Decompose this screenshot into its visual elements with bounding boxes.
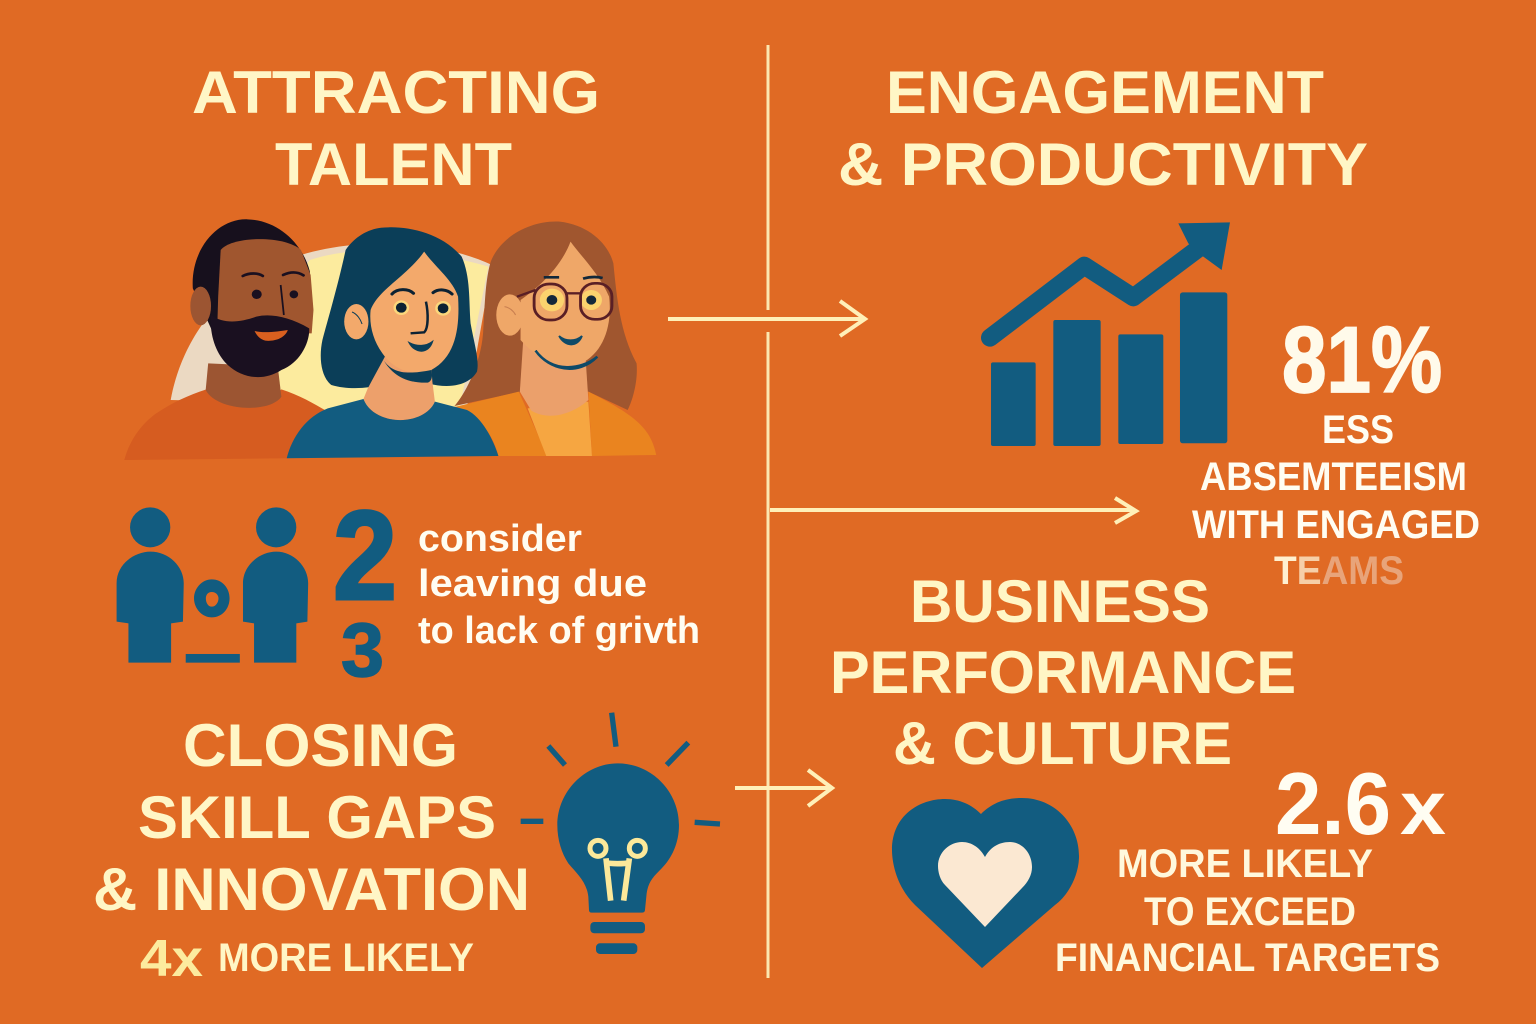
heading: attracting talent <box>192 59 600 198</box>
heading: closing skill gaps: & INNOVATION <box>93 856 530 923</box>
text: more likely to exceed financial targets: TO EXCEED <box>1144 890 1356 934</box>
text: less absenteeism: TEAMS <box>1274 549 1404 593</box>
arrow: talent to engagement <box>668 301 865 336</box>
text: less absenteeism: WITH ENGAGED <box>1192 503 1480 547</box>
icon: heart <box>892 798 1079 968</box>
text: consider leaving: consider <box>418 518 582 560</box>
heading: closing skill gaps: CLOSING <box>183 712 458 779</box>
heading: attracting talent: TALENT <box>275 131 512 198</box>
text: consider leaving: to lack of grivth <box>418 610 700 652</box>
stat: 4x more likely: 4x <box>140 930 203 988</box>
text: consider leaving <box>418 518 700 652</box>
text: consider leaving: leaving due <box>418 563 647 605</box>
text: less absenteeism: ESS <box>1322 408 1394 452</box>
icon: light bulb <box>521 713 720 954</box>
person: woman in blue <box>287 227 498 458</box>
heading: business performance and culture: & CULTURE <box>893 710 1232 777</box>
text: less absenteeism: ABSEMTEEISM <box>1200 455 1467 499</box>
heading: closing skill gaps: SKILL GAPS <box>138 784 496 851</box>
icon: two people with circle <box>117 507 308 663</box>
arrow: skills to performance <box>735 770 832 806</box>
stat: two thirds: 2 <box>333 485 397 626</box>
heading: business performance and culture: BUSINESS <box>910 568 1210 635</box>
text: more likely to exceed financial targets: FINANCIAL TARGETS <box>1055 936 1440 980</box>
heading: business performance and culture <box>830 568 1296 777</box>
stat: 2.6x: 2.6 <box>1275 754 1391 853</box>
person: woman with glasses <box>455 222 656 456</box>
stat: two thirds <box>333 485 397 693</box>
heading: attracting talent: ATTRACTING <box>192 59 600 126</box>
text: more likely to exceed financial targets <box>1055 842 1440 980</box>
heading: business performance and culture: PERFORMANCE <box>830 639 1296 706</box>
background glow <box>171 244 492 410</box>
stat: two thirds: 3 <box>341 608 384 693</box>
chart: rising bars with arrow <box>990 222 1230 446</box>
heading: engagement and productivity: & PRODUCTIVITY <box>838 131 1368 198</box>
stat: 2.6x: x <box>1400 766 1446 851</box>
heading: engagement and productivity <box>838 59 1368 198</box>
text: less absenteeism <box>1192 408 1480 593</box>
heading: engagement and productivity: ENGAGEMENT <box>886 59 1324 126</box>
person: bearded man <box>124 219 328 460</box>
illustration: three people <box>124 219 656 460</box>
text: more likely to exceed financial targets: MORE LIKELY <box>1117 842 1373 886</box>
stat: 4x more likely: MORE LIKELY <box>218 936 474 980</box>
stat: 81 percent: 81% <box>1282 308 1442 412</box>
arrow: to absenteeism stat <box>770 498 1136 523</box>
stat: 4x more likely <box>140 930 474 988</box>
heading: closing skill gaps <box>93 712 530 923</box>
